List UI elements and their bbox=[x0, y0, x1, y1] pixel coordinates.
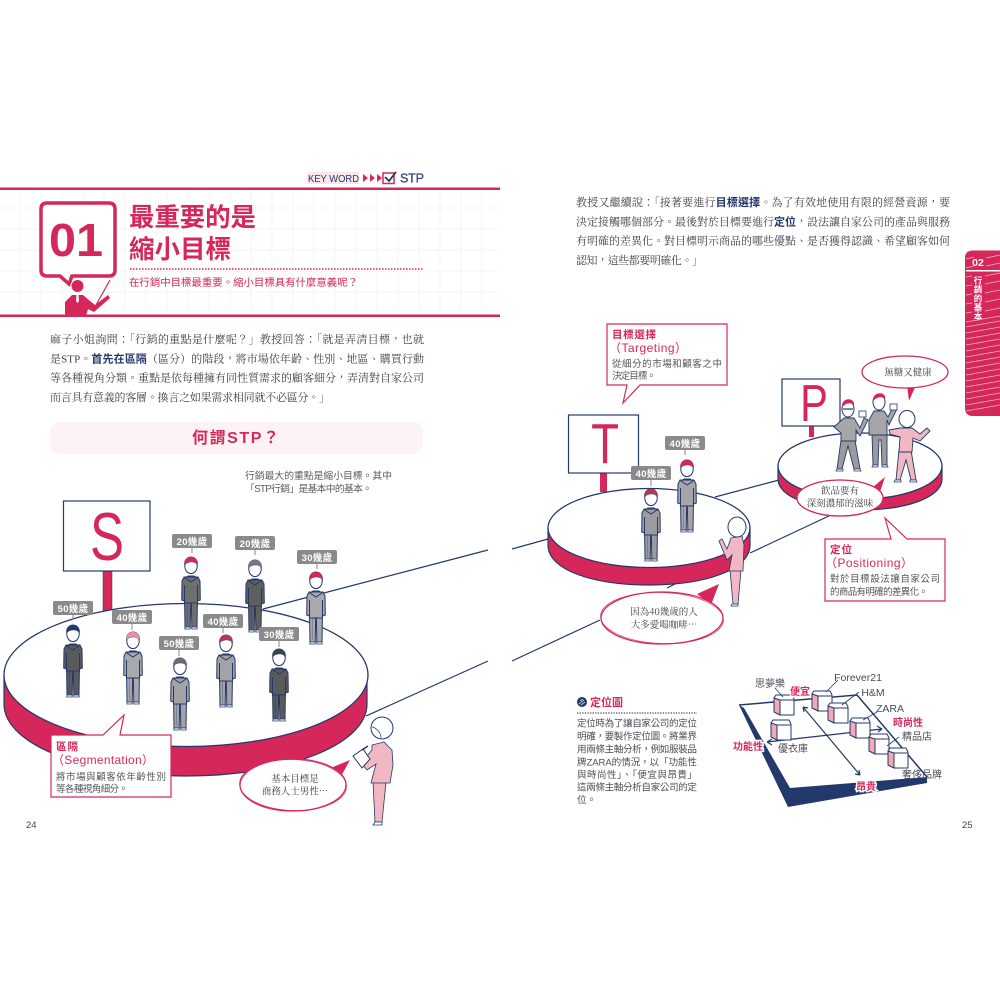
callout: positioning: 的商品有明確的差異化。 bbox=[830, 586, 928, 598]
left body text bbox=[50, 332, 424, 404]
number badge 01 with presenter icon: 01 bbox=[49, 214, 103, 266]
left body text: 麻子小姐詢問：「行銷的重點是什麼呢？」教授回答：「就是弄清目標，也就 bbox=[50, 332, 424, 346]
chapter tab: 行 bbox=[974, 276, 983, 286]
speech bubble: coffee bbox=[600, 584, 724, 646]
map labels: ZARA bbox=[876, 703, 904, 715]
tag 20 bbox=[172, 534, 212, 553]
positioning map bbox=[733, 672, 942, 807]
targeted person back bbox=[678, 460, 696, 532]
age tags targeted bbox=[631, 436, 705, 486]
S disc bbox=[4, 604, 368, 776]
tag 40: 40幾歲 bbox=[670, 438, 701, 450]
number badge 01 with presenter icon bbox=[41, 203, 115, 316]
right body text: 有明確的差異化。對目標明示商品的哪些優點、是否獲得認識、希望顧客如何 bbox=[576, 234, 950, 248]
map leader lines bbox=[775, 680, 899, 746]
cube luxury bbox=[888, 748, 908, 768]
person 20s bbox=[182, 557, 200, 629]
note text: 用兩條主軸分析，例如服裝品 bbox=[577, 744, 697, 756]
person 50s bbox=[64, 625, 82, 697]
connector lines between discs bbox=[263, 480, 831, 716]
tag 50 bbox=[159, 636, 199, 656]
header band with grid bbox=[0, 188, 500, 317]
title: 縮小目標 bbox=[129, 236, 231, 264]
right body text: 教授又繼續說：「接著要進行目標選擇。為了有效地使用有限的經營資源，要 bbox=[576, 195, 950, 209]
chapter tab: 基 bbox=[974, 302, 983, 312]
woman with notepad bbox=[353, 717, 393, 825]
callout: segmentation bbox=[51, 715, 171, 797]
chapter tab bbox=[965, 250, 1000, 416]
right body text: 決定接觸哪個部分。最後對於目標要進行定位，設法讓自家公司的產品與服務 bbox=[576, 214, 950, 228]
note text: 牌ZARA的情況，以「功能性 bbox=[577, 756, 697, 768]
person 50s front bbox=[171, 658, 189, 730]
tag 20 bbox=[235, 536, 275, 555]
page number 24: 24 bbox=[26, 820, 37, 831]
map labels: 昂貴 bbox=[856, 780, 876, 793]
caption bbox=[245, 469, 392, 495]
callout: targeting bbox=[607, 324, 727, 403]
P disc bbox=[778, 433, 942, 510]
callout: positioning: 定位 bbox=[830, 543, 852, 556]
note text: 明確，要製作定位圖。將業界 bbox=[577, 730, 697, 742]
title: 最重要的是 bbox=[129, 204, 256, 232]
note text: 定位時為了讓自家公司的定位 bbox=[577, 718, 697, 730]
tag 40 bbox=[112, 610, 152, 630]
section heading: 何謂STP？ bbox=[192, 428, 279, 447]
chapter tab: 本 bbox=[974, 312, 983, 322]
map labels: 功能性 bbox=[733, 740, 763, 753]
speech bubble: coffee: 因為40幾歲的人 bbox=[630, 604, 698, 618]
callout: positioning bbox=[825, 518, 945, 601]
person 30s bbox=[307, 572, 325, 644]
cube shimamura bbox=[774, 695, 794, 715]
map labels: 奢侈品牌 bbox=[902, 768, 942, 781]
map board bbox=[739, 695, 927, 807]
callout: positioning: 對於目標設法讓自家公司 bbox=[830, 573, 940, 585]
man with glasses holding cup bbox=[834, 399, 868, 471]
cube forever21 bbox=[812, 691, 832, 711]
callout: segmentation: 將市場與顧客依年齡性別 bbox=[56, 771, 166, 783]
speech bubble: business men: 商務人士男性… bbox=[262, 784, 328, 798]
person 40s front bbox=[217, 635, 235, 707]
tag 50: 50幾歲 bbox=[58, 603, 89, 615]
caption: 行銷最大的重點是縮小目標。其中 bbox=[245, 469, 392, 482]
targeted person front bbox=[642, 489, 660, 561]
tag 50 bbox=[53, 601, 93, 620]
T sign bbox=[568, 411, 638, 492]
speech bubble: business men bbox=[239, 758, 350, 812]
caption: 「STP行銷」是基本中的基本。 bbox=[245, 482, 372, 495]
speech bubble: drink flavour: 深刻濃郁的滋味 bbox=[807, 496, 874, 510]
man holding cup bbox=[869, 393, 897, 467]
cube zara bbox=[850, 718, 870, 738]
map labels: 便宜 bbox=[790, 685, 810, 698]
tag 40 bbox=[203, 614, 243, 633]
chapter tab: 的 bbox=[974, 294, 983, 304]
tag 30: 30幾歲 bbox=[302, 552, 333, 564]
callout: targeting: 從細分的市場和顧客之中 bbox=[612, 358, 722, 370]
speech bubble: sugar free: 無糖又健康 bbox=[884, 364, 932, 378]
person group: targeted customers bbox=[642, 460, 696, 561]
page number 25: 25 bbox=[962, 820, 973, 831]
speech bubble: sugar free bbox=[862, 356, 948, 401]
tag 30 bbox=[259, 627, 299, 647]
chapter tab: 銷 bbox=[974, 284, 983, 294]
left body text: 是STP。首先在區隔（區分）的階段，將市場依年齡、性別、地區、購買行動 bbox=[50, 351, 424, 365]
speech bubble: business men: 基本目標是 bbox=[271, 771, 319, 785]
S sign: S bbox=[90, 499, 124, 575]
cube uniqlo bbox=[771, 720, 791, 740]
note text: 位。 bbox=[577, 794, 596, 806]
person 30s front bbox=[270, 649, 288, 721]
map labels bbox=[733, 672, 942, 793]
title bbox=[129, 204, 256, 264]
S sign bbox=[64, 499, 150, 612]
callout: targeting: （Targeting） bbox=[609, 341, 687, 355]
note text bbox=[577, 718, 697, 806]
woman pointing bbox=[719, 517, 746, 606]
speech bubble: coffee: 大多愛喝咖啡… bbox=[631, 617, 697, 631]
P sign: P bbox=[800, 374, 828, 432]
note heading: 定位圖 bbox=[590, 695, 623, 709]
keyword label bbox=[307, 172, 424, 186]
positioning map note bbox=[577, 695, 697, 806]
cube h&m bbox=[828, 703, 848, 723]
chapter tab: 02 bbox=[972, 257, 984, 269]
person 40s bbox=[124, 632, 142, 704]
right body text bbox=[576, 195, 950, 267]
T sign: T bbox=[591, 411, 619, 475]
note text: 這兩條主軸分析自家公司的定 bbox=[577, 782, 697, 794]
map labels: 優衣庫 bbox=[778, 742, 808, 755]
map labels: H&M bbox=[861, 687, 885, 699]
subtitle: 在行銷中目標最重要。縮小目標具有什麼意義呢？ bbox=[129, 276, 358, 289]
callout: segmentation: （Segmentation） bbox=[52, 753, 154, 767]
callout: segmentation: 區隔 bbox=[56, 740, 78, 753]
left body text: 而言具有意義的客層。換言之如果需求相同就不必區分。」 bbox=[50, 390, 330, 404]
age tags bbox=[53, 534, 337, 656]
map labels: Forever21 bbox=[834, 672, 882, 684]
callout: targeting: 決定目標。 bbox=[612, 370, 656, 382]
P sign bbox=[782, 374, 840, 437]
keyword label: KEY WORD bbox=[308, 173, 359, 185]
tag 40: 40幾歲 bbox=[636, 468, 667, 480]
map cubes bbox=[771, 691, 908, 768]
keyword label: STP bbox=[400, 172, 424, 186]
callout: targeting: 目標選擇 bbox=[612, 328, 656, 341]
map axes bbox=[767, 707, 882, 775]
icon: note disc bbox=[577, 697, 587, 707]
tag 40: 40幾歲 bbox=[117, 612, 148, 624]
note text: 與時尚性」、「便宜與昂貴」 bbox=[577, 769, 697, 781]
person 20s grey hair bbox=[246, 560, 264, 632]
map labels: 思夢樂 bbox=[755, 677, 785, 690]
T disc bbox=[548, 488, 750, 585]
section heading bbox=[50, 422, 423, 454]
tag 20: 20幾歲 bbox=[177, 536, 208, 548]
cube boutique bbox=[869, 734, 889, 754]
tag 40: 40幾歲 bbox=[208, 616, 239, 628]
right body text: 認知，這些都要明確化。」 bbox=[576, 253, 703, 267]
map labels: 精品店 bbox=[902, 730, 932, 743]
tag 30 bbox=[297, 550, 337, 569]
speech bubble: drink flavour: 飲品要有 bbox=[821, 483, 859, 497]
callout: segmentation: 等各種視角細分。 bbox=[56, 783, 128, 795]
tag 30: 30幾歲 bbox=[264, 629, 295, 641]
tag 50: 50幾歲 bbox=[164, 638, 195, 650]
speech bubble: drink flavour bbox=[797, 477, 885, 516]
map labels: 時尚性 bbox=[893, 716, 923, 729]
callout: positioning: （Positioning） bbox=[825, 556, 913, 570]
left body text: 等各種視角分類。重點是依每種擁有同性質需求的顧客細分，弄清對自家公司 bbox=[50, 371, 424, 385]
person group: segmentation crowd bbox=[64, 557, 325, 730]
woman in pink bbox=[889, 410, 930, 482]
tag 20: 20幾歲 bbox=[240, 538, 271, 550]
